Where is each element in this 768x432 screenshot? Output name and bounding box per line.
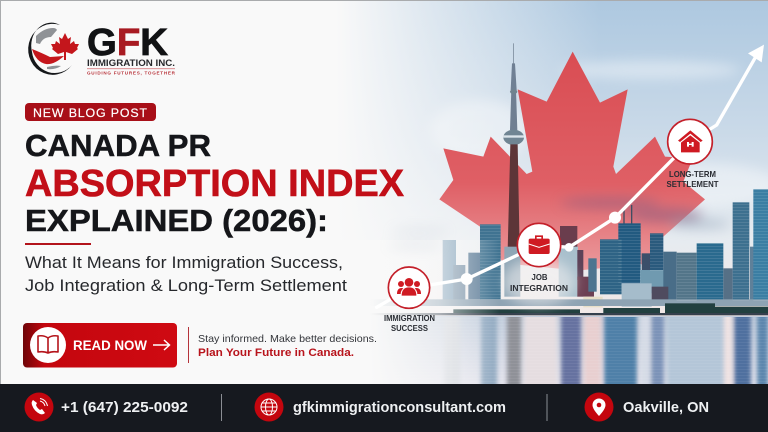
wordmark: Immigration Inc.: IMMIGRATION INC. [87, 58, 175, 68]
accent rule [25, 243, 91, 245]
contact: phone [24, 392, 188, 422]
contact: phone: +1 (647) 225-0092 [61, 399, 188, 416]
arrow [153, 340, 170, 350]
logo: GFK Immigration [28, 22, 176, 76]
label: immigration success: SUCCESS [391, 323, 428, 333]
clouds over leaf [560, 198, 730, 228]
divider [188, 327, 189, 363]
callout: tagline: Stay informed. Make better decisions. [198, 333, 377, 345]
maple leaf backdrop [439, 52, 705, 270]
Toronto skyline [370, 43, 768, 315]
callout: tagline: Plan Your Future in Canada. [198, 347, 354, 359]
panel: background sky [0, 0, 768, 320]
badge: new blog post [25, 103, 156, 121]
label: long-term settlement: LONG-TERM [669, 169, 716, 179]
badge: new blog post: NEW BLOG POST [33, 106, 147, 120]
glow behind job label [503, 258, 575, 306]
icon: long-term settlement [668, 119, 712, 164]
window texture [480, 189, 768, 301]
subtitle [25, 254, 347, 295]
distant clouds [387, 228, 450, 249]
tagline: GUIDING FUTURES, TOGETHER [87, 70, 176, 76]
label: job integration: JOB [532, 272, 548, 282]
panel: sky clouds [430, 61, 768, 207]
callout: tagline [198, 333, 377, 359]
title [25, 129, 405, 238]
panel: lower left fade [0, 240, 500, 384]
contact: website: gfkimmigrationconsultant.com [293, 399, 506, 416]
growth arrow line [377, 45, 764, 307]
label: long-term settlement: SETTLEMENT [666, 179, 718, 189]
button: read now: READ NOW [73, 338, 147, 353]
footer bar [0, 384, 768, 432]
contact: location: Oakville, ON [623, 399, 709, 416]
label: immigration success: IMMIGRATION [384, 313, 435, 323]
contact: location [584, 392, 709, 422]
label: job integration: INTEGRATION [510, 283, 568, 293]
icon: immigration success [388, 267, 430, 308]
icon: CN Tower [503, 43, 524, 250]
title: CANADA PR [25, 129, 211, 163]
wordmark: GFK: GFK [87, 22, 169, 64]
shoreline trees [453, 303, 768, 313]
panel: lake water [0, 316, 768, 384]
title: ABSORPTION INDEX [25, 163, 405, 205]
title: EXPLAINED (2026): [25, 204, 328, 238]
icon: open book [30, 327, 66, 363]
label: immigration success [384, 313, 435, 333]
contact: website [254, 392, 506, 422]
subtitle: What It Means for Immigration Success, [25, 254, 343, 272]
panel: left white fade [0, 0, 600, 320]
icon: globe with maple leaf [28, 23, 79, 75]
label: job integration [510, 272, 568, 293]
icon: job integration [517, 223, 561, 267]
button: read now [23, 323, 177, 368]
label: long-term settlement [666, 169, 718, 189]
subtitle: Job Integration & Long-Term Settlement [25, 277, 347, 295]
